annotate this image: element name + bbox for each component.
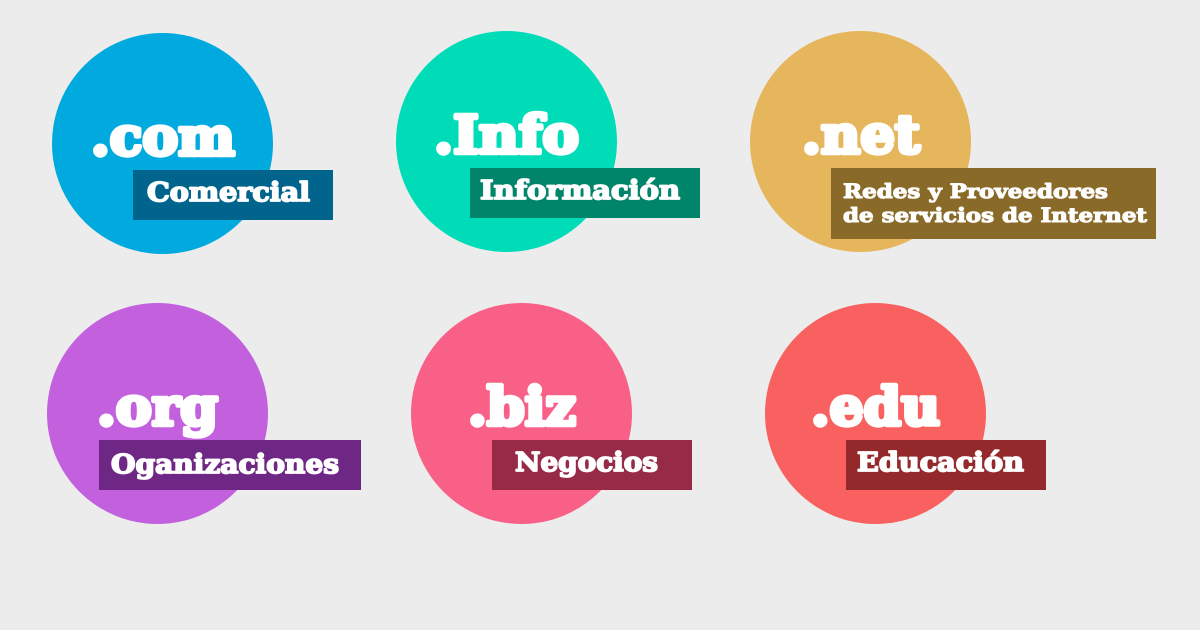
label text: Comercial: Comercial xyxy=(147,178,310,208)
label text: Negocios: Negocios xyxy=(515,448,658,478)
panel: .org xyxy=(47,303,361,524)
label box: Organizaciones xyxy=(99,440,361,490)
panel: .edu xyxy=(765,303,1046,524)
circle: .Info xyxy=(396,31,617,252)
label text: de servicios de Internet: de servicios de Internet xyxy=(843,203,1148,227)
label text: Educación: Educación xyxy=(857,448,1024,478)
label text: Oganizaciones: Oganizaciones xyxy=(111,450,339,480)
circle: .biz xyxy=(411,303,632,524)
panel: .biz xyxy=(411,303,692,524)
heading: .biz: .biz xyxy=(468,377,576,438)
heading: .net: .net xyxy=(802,105,920,166)
heading: .org: .org xyxy=(97,377,218,438)
label text: Redes y Proveedores: Redes y Proveedores xyxy=(843,179,1108,203)
label text: Información: Información xyxy=(480,176,680,206)
heading: .com: .com xyxy=(91,107,235,168)
circle: .com xyxy=(52,33,273,254)
heading: .edu: .edu xyxy=(811,377,940,438)
heading: .Info: .Info xyxy=(434,105,579,166)
panel: .com xyxy=(52,33,333,254)
label box: Comercial xyxy=(133,170,333,220)
panel: .Info xyxy=(396,31,700,252)
circle: .org xyxy=(47,303,268,524)
label box: Educación xyxy=(846,440,1046,490)
label box: Redes y Proveedores xyxy=(831,168,1156,239)
circle: .edu xyxy=(765,303,986,524)
panel: .net xyxy=(750,31,1156,252)
label box: Información xyxy=(470,168,700,218)
circle: .net xyxy=(750,31,971,252)
label box: Negocios xyxy=(492,440,692,490)
